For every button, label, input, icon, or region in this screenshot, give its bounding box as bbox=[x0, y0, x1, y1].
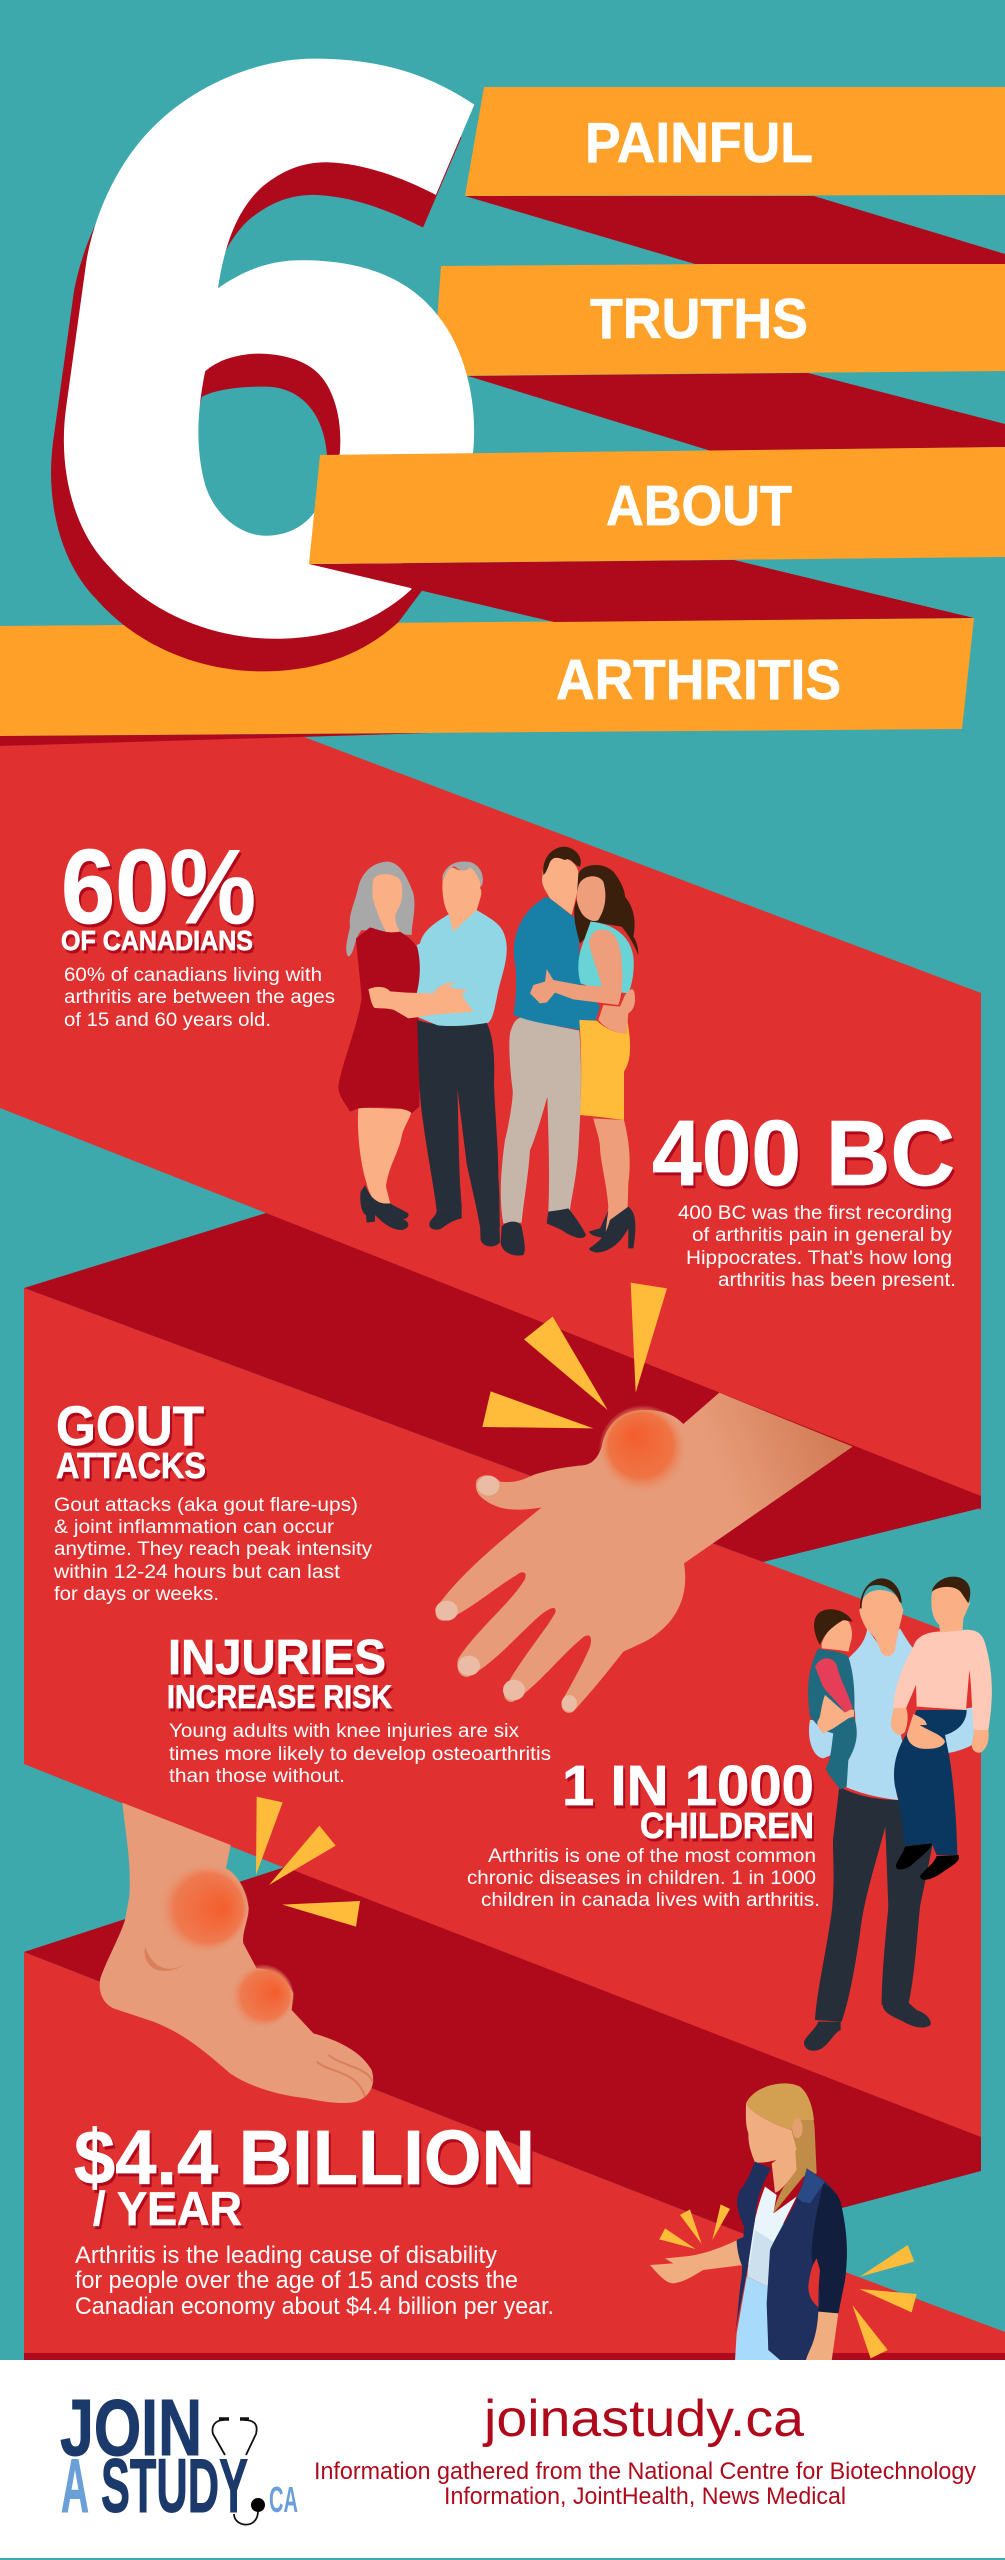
logo: join a study: A bbox=[61, 2444, 89, 2529]
stat: 1 in 1000 children: Arthritis is one of the most common bbox=[488, 1846, 816, 1867]
panel: top red band bbox=[0, 737, 981, 1510]
stat: 60% of canadians: 60% bbox=[61, 828, 256, 946]
title words: PAINFUL bbox=[585, 111, 813, 175]
stat: gout attacks: for days or weeks. bbox=[54, 1584, 219, 1605]
illustration: swollen foot with pain rays bbox=[100, 1797, 373, 2103]
banner shadow: truths bbox=[468, 373, 1005, 451]
bottom dark strip bbox=[24, 2353, 1005, 2361]
illustration: two couples bbox=[338, 847, 638, 1256]
panel: second dark fold bbox=[24, 1867, 981, 2234]
banner: painful ribbon bbox=[465, 87, 1005, 196]
stat: gout attacks: ATTACKS bbox=[56, 1445, 206, 1486]
stat: injuries increase risk: Young adults with knee injuries are six bbox=[169, 1721, 520, 1742]
banner: truths ribbon bbox=[433, 262, 1005, 376]
stat: injuries increase risk bbox=[167, 1631, 551, 1787]
banner shadow: about bbox=[309, 560, 974, 622]
stat: gout attacks: Gout attacks (aka gout flare-ups) bbox=[54, 1495, 358, 1516]
footer sources bbox=[314, 2458, 976, 2510]
stat: 1 in 1000 children: CHILDREN bbox=[640, 1805, 814, 1846]
stat: 400 BC: 400 BC was the first recording bbox=[678, 1203, 952, 1224]
stat: 400 BC bbox=[652, 1101, 956, 1291]
stat: 60% of canadians: arthritis are between the ages bbox=[64, 987, 335, 1008]
big number 6 bbox=[51, 59, 474, 671]
logo: join a study bbox=[60, 2383, 298, 2529]
panel: bottom red band bbox=[24, 1952, 1005, 2360]
logo: join a study: STUDY bbox=[101, 2444, 248, 2529]
stat: gout attacks: anytime. They reach peak intensity bbox=[54, 1539, 373, 1560]
illustration: father carrying two children bbox=[804, 1577, 992, 2051]
panel: footer bbox=[0, 2360, 1005, 2558]
stat: gout attacks: & joint inflammation can occur bbox=[54, 1517, 335, 1538]
footer sources: Information, JointHealth, News Medical bbox=[444, 2483, 846, 2510]
banner: about ribbon bbox=[309, 447, 1005, 564]
title words bbox=[556, 111, 841, 712]
footer sources: Information gathered from the National Centre for Biotechnology bbox=[314, 2458, 976, 2485]
stat: 60% of canadians: OF CANADIANS bbox=[61, 925, 253, 956]
logo: join a study: JOIN bbox=[60, 2383, 202, 2472]
stat: 1 in 1000 children bbox=[467, 1754, 820, 1911]
stat: 4.4 billion per year: $4.4 BILLION bbox=[74, 2115, 535, 2201]
title words: TRUTHS bbox=[590, 287, 808, 351]
stat: 4.4 billion per year: Arthritis is the leading cause of disability bbox=[75, 2242, 497, 2269]
stat: gout attacks: GOUT bbox=[56, 1394, 204, 1457]
stat: 400 BC: 400 BC bbox=[652, 1101, 955, 1205]
stat: 400 BC: Hippocrates. That's how long bbox=[686, 1248, 952, 1269]
stat: 1 in 1000 children: children in canada lives with arthritis. bbox=[481, 1890, 820, 1911]
stat: gout attacks bbox=[53, 1394, 373, 1605]
stat: 60% of canadians: 60% of canadians living with bbox=[64, 965, 322, 986]
stat: 4.4 billion per year: for people over the age of 15 and costs the bbox=[75, 2267, 518, 2294]
stat: 60% of canadians bbox=[61, 828, 335, 1031]
stat: injuries increase risk: INCREASE RISK bbox=[167, 1679, 392, 1715]
stat: 60% of canadians: of 15 and 60 years old. bbox=[64, 1010, 271, 1031]
stat: 4.4 billion per year: Canadian economy about $4.4 billion per year. bbox=[75, 2293, 554, 2320]
illustration: woman with painful arm bbox=[650, 2083, 917, 2361]
panel: middle red band bbox=[24, 1288, 981, 2145]
banner: arthritis ribbon bbox=[0, 618, 974, 736]
stat: injuries increase risk: INJURIES bbox=[168, 1631, 386, 1685]
title words: ARTHRITIS bbox=[556, 648, 841, 712]
logo: join a study: CA bbox=[269, 2479, 298, 2520]
stat: 1 in 1000 children: 1 IN 1000 bbox=[562, 1754, 814, 1818]
banner shadow: painful bbox=[465, 196, 1005, 264]
stat: 400 BC: arthritis has been present. bbox=[718, 1270, 956, 1291]
stat: injuries increase risk: times more likely to develop osteoarthritis bbox=[169, 1744, 551, 1765]
panel: first dark fold bbox=[24, 1213, 981, 1562]
title words: ABOUT bbox=[606, 474, 792, 538]
stat: 400 BC: of arthritis pain in general by bbox=[692, 1225, 953, 1246]
stat: injuries increase risk: than those without. bbox=[169, 1766, 345, 1787]
footer website: joinastudy.ca bbox=[482, 2390, 804, 2448]
banner shadow: arthritis bbox=[0, 733, 430, 746]
stat: 4.4 billion per year bbox=[74, 2115, 554, 2320]
stat: gout attacks: within 12-24 hours but can last bbox=[53, 1562, 341, 1583]
illustration: swollen hand with pain rays bbox=[435, 1283, 853, 1713]
stat: 4.4 billion per year: / YEAR bbox=[93, 2182, 242, 2235]
stat: 1 in 1000 children: chronic diseases in children. 1 in 1000 bbox=[467, 1868, 816, 1889]
